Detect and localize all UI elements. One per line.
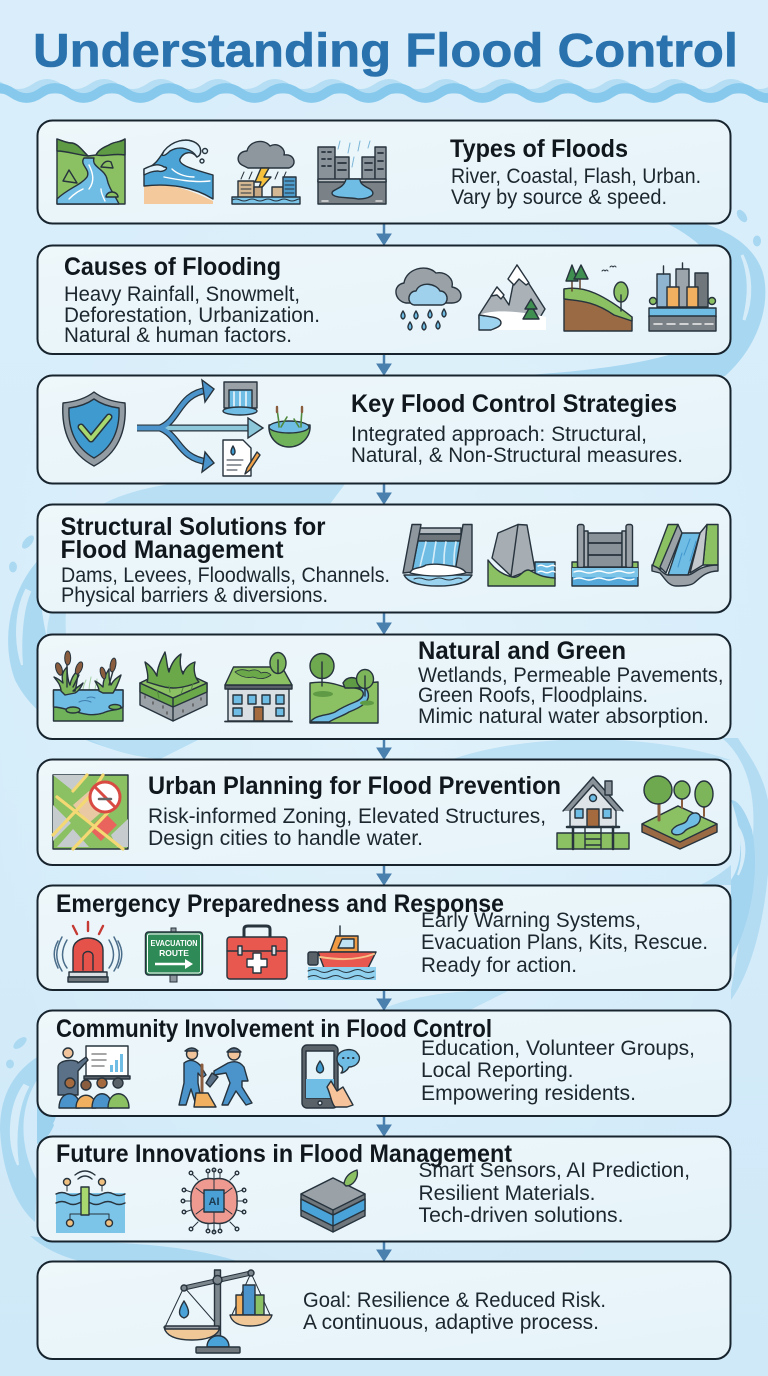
panel box <box>38 504 730 612</box>
description: Natural & human factors. <box>64 324 292 347</box>
panel box <box>38 376 730 484</box>
heading: Future Innovations in Flood Management <box>56 1140 513 1168</box>
description: Design cities to handle water. <box>148 827 423 850</box>
heading: Natural and Green <box>418 637 626 665</box>
panel: types of floods <box>38 120 730 224</box>
description: Wetlands, Permeable Pavements, <box>418 664 724 687</box>
panel: key flood control strategies <box>38 376 730 484</box>
description <box>421 909 708 977</box>
description: Early Warning Systems, <box>421 909 641 932</box>
description: Green Roofs, Floodplains. <box>418 684 648 707</box>
icon: zoning map <box>53 775 128 849</box>
description: Education, Volunteer Groups, <box>421 1037 695 1060</box>
icon: community teaching <box>58 1046 130 1108</box>
icon: snowmelt <box>479 265 546 330</box>
description: Mimic natural water absorption. <box>418 705 709 728</box>
icon: AI brain <box>181 1168 247 1234</box>
flow arrows between panels <box>377 224 391 1261</box>
icon: heavy rainfall <box>396 268 461 330</box>
wave band <box>0 79 768 98</box>
description: Deforestation, Urbanization. <box>64 304 320 327</box>
description <box>418 1159 690 1227</box>
heading: Key Flood Control Strategies <box>351 390 677 418</box>
icon: evacuation route sign: ROUTE <box>159 948 189 958</box>
description <box>303 1289 606 1334</box>
heading: Emergency Preparedness and Response <box>56 890 504 918</box>
description: River, Coastal, Flash, Urban. <box>451 165 701 188</box>
icon: dam <box>403 524 472 586</box>
icon: warning siren <box>54 922 122 982</box>
icon: permeable soil block <box>140 652 207 721</box>
panel: causes of flooding <box>38 246 730 354</box>
heading: Flood Management <box>60 536 284 564</box>
title: Understanding Flood Control <box>33 24 738 76</box>
panel: structural solutions <box>38 504 730 612</box>
panel box <box>38 886 730 990</box>
heading: Urban Planning for Flood Prevention <box>148 772 561 800</box>
description: Heavy Rainfall, Snowmelt, <box>64 283 300 306</box>
icon: floodwall <box>572 524 638 586</box>
description: A continuous, adaptive process. <box>303 1311 599 1334</box>
icon: flash flood <box>232 141 300 204</box>
heading: Structural Solutions for <box>60 513 326 541</box>
heading <box>60 513 326 564</box>
panel box <box>38 1010 730 1116</box>
icon: coastal flood <box>144 140 213 204</box>
description <box>451 165 701 209</box>
description: Tech-driven solutions. <box>418 1204 624 1227</box>
description <box>351 423 683 467</box>
description: Evacuation Plans, Kits, Rescue. <box>421 931 708 954</box>
panel box <box>38 1136 730 1242</box>
description: Integrated approach: Structural, <box>351 423 647 446</box>
icon: volunteers cleaning <box>179 1048 252 1107</box>
heading: Types of Floods <box>450 135 628 163</box>
panel box <box>38 634 730 739</box>
panel: urban planning <box>38 760 730 865</box>
description: Resilient Materials. <box>418 1182 596 1205</box>
icon: park with pond <box>642 776 717 849</box>
icon: green roof building <box>225 652 292 722</box>
icon: mini wetland <box>269 407 310 447</box>
icon: first aid kit <box>227 926 287 979</box>
panel box <box>38 760 730 865</box>
description: Local Reporting. <box>421 1059 574 1082</box>
icon: urban flood <box>318 141 386 204</box>
description: Dams, Levees, Floodwalls, Channels. <box>61 564 390 587</box>
icon: document plan <box>223 440 260 476</box>
panel: future innovations <box>38 1136 730 1242</box>
description: Ready for action. <box>421 954 577 977</box>
icon: wetland <box>54 651 123 721</box>
icon: river flood <box>57 139 125 204</box>
panel: goal <box>38 1262 730 1359</box>
icon: mini dam <box>223 382 257 415</box>
description: Risk-informed Zoning, Elevated Structures, <box>148 805 546 828</box>
panel: natural and green <box>38 634 730 739</box>
icon: phone reporting <box>302 1045 359 1108</box>
icon: rescue boat <box>308 926 376 980</box>
icon: balance scale <box>164 1270 272 1353</box>
heading: Community Involvement in Flood Control <box>56 1015 492 1043</box>
icon: levee <box>488 524 555 586</box>
panel: community involvement <box>38 1010 730 1116</box>
heading: Causes of Flooding <box>64 253 281 281</box>
icon: resilient material block <box>301 1170 365 1232</box>
description <box>64 283 320 347</box>
description: Natural, & Non-Structural measures. <box>351 444 683 467</box>
description: Empowering residents. <box>421 1082 636 1105</box>
icon: shield <box>63 392 125 466</box>
description <box>421 1037 695 1105</box>
icon: water sensors <box>56 1171 125 1233</box>
icon: deforestation hillside <box>564 265 632 331</box>
description: Goal: Resilience & Reduced Risk. <box>303 1289 606 1312</box>
icon: evacuation route sign <box>146 928 202 982</box>
icon: evacuation route sign: EVACUATION <box>150 938 198 948</box>
icon: channel <box>652 524 718 586</box>
description <box>418 664 724 728</box>
description: Vary by source & speed. <box>451 186 667 209</box>
description: Smart Sensors, AI Prediction, <box>418 1159 690 1182</box>
description <box>61 564 390 607</box>
panel: emergency preparedness <box>38 886 730 990</box>
icon: floodplain <box>310 654 378 723</box>
icon: AI brain: AI <box>208 1196 220 1208</box>
icon: elevated house <box>557 777 629 849</box>
panel box <box>38 246 730 354</box>
panel box <box>38 1262 730 1359</box>
description <box>148 805 546 850</box>
arrows: three strategies <box>137 380 263 472</box>
icon: urbanization <box>649 263 716 331</box>
description: Physical barriers & diversions. <box>61 584 328 607</box>
panel box <box>38 120 730 224</box>
